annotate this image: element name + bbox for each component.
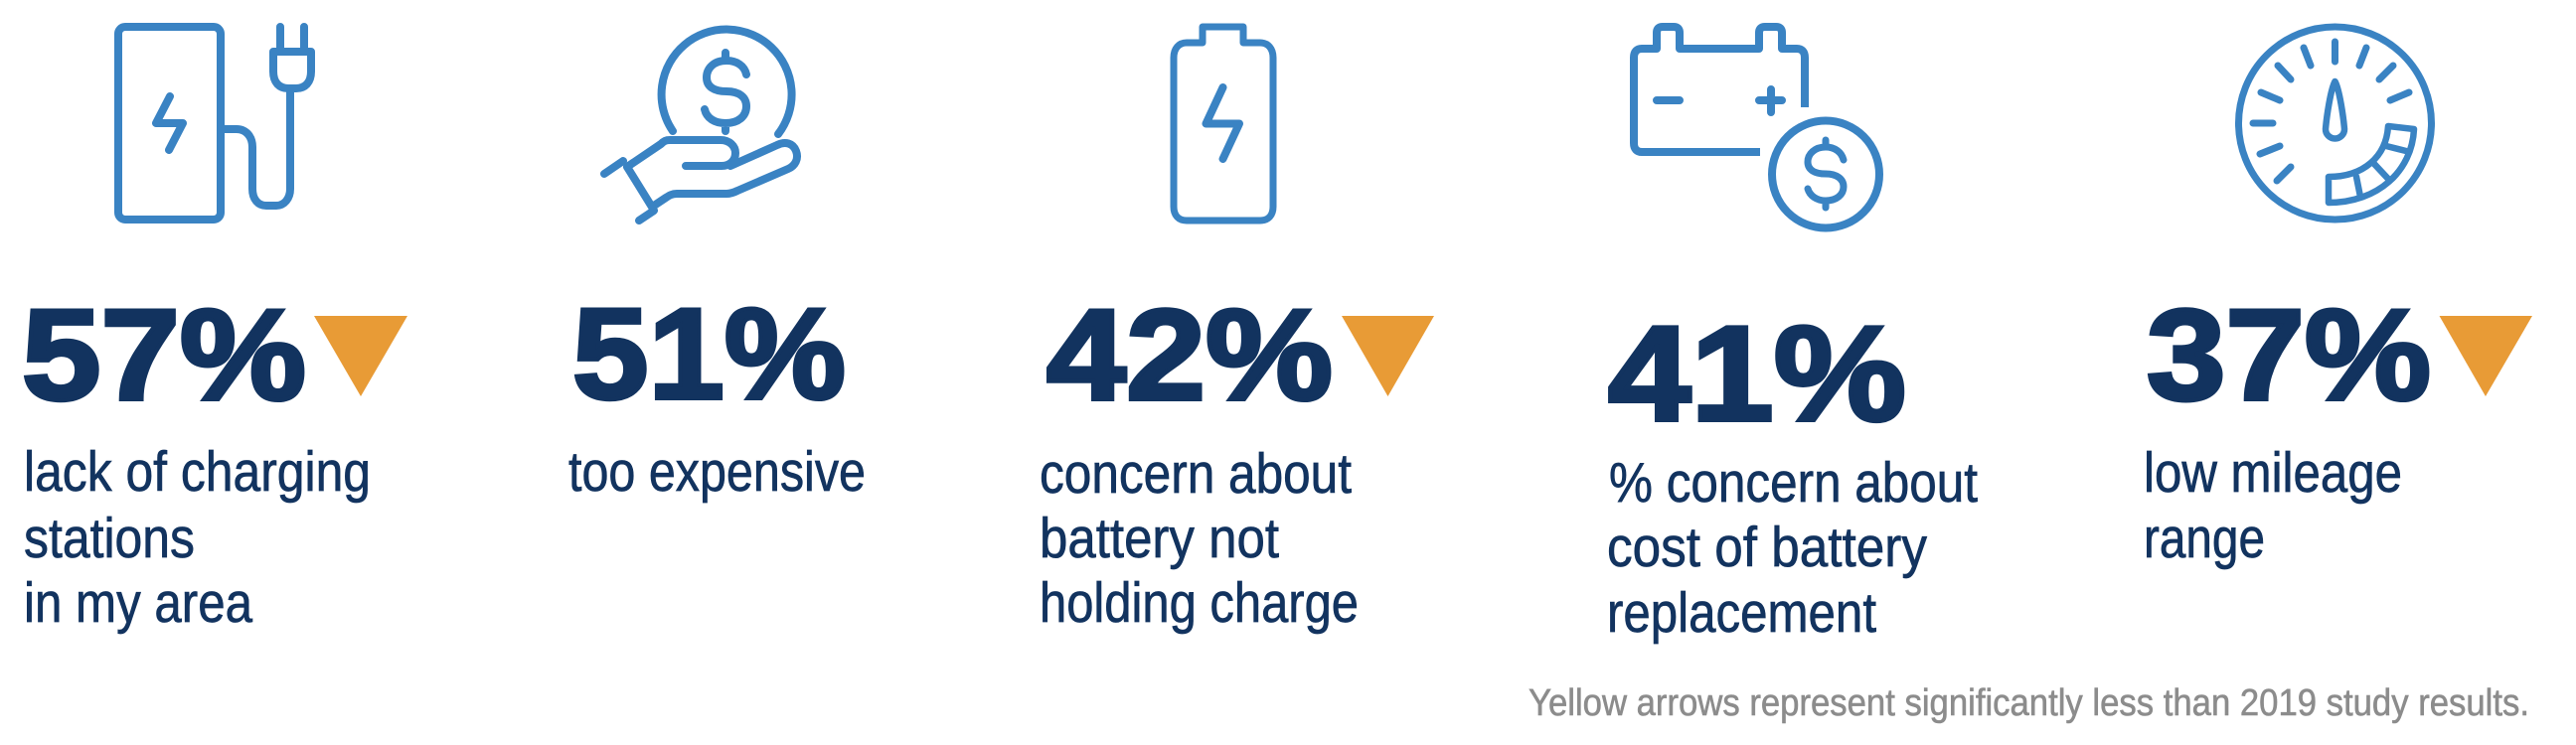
label: lack of charging stations in my area <box>24 440 371 635</box>
label: % concern about cost of battery replacement: % concern about <box>1609 451 1978 515</box>
label: low mileage range <box>2144 441 2402 570</box>
label: low mileage range: low mileage <box>2144 441 2402 505</box>
label: concern about battery not holding charge: holding charge <box>1040 571 1359 635</box>
arrow: down, lack of charging stations <box>314 316 407 396</box>
panel: cost of battery replacement <box>1607 27 1978 645</box>
icon: hand holding dollar coin <box>604 30 797 221</box>
statistic: 51%: 51% <box>572 281 846 426</box>
label: low mileage range: range <box>2144 507 2265 570</box>
label: concern about battery not holding charge: battery not <box>1040 507 1279 570</box>
icon: car battery with dollar coin <box>1634 27 1879 228</box>
arrow: down, battery not holding charge <box>1342 316 1434 396</box>
label: lack of charging stations in my area: stations <box>24 507 195 570</box>
panel: too expensive <box>568 30 866 504</box>
icon: battery with lightning bolt <box>1174 27 1273 221</box>
label: too expensive: too expensive <box>568 440 866 504</box>
statistic: 41%: 41% <box>1608 298 1906 449</box>
label: concern about battery not holding charge <box>1040 442 1359 635</box>
label: concern about battery not holding charge: concern about <box>1040 442 1352 506</box>
label: lack of charging stations in my area: lack of charging <box>24 440 371 504</box>
panel: battery not holding charge <box>1040 27 1434 635</box>
statistic: 57%: 57% <box>22 282 306 427</box>
statistic: 37%: 37% <box>2147 282 2431 427</box>
arrow: down, low mileage range <box>2439 316 2532 396</box>
label: lack of charging stations in my area: in my area <box>24 571 252 635</box>
icon: charging station with plug <box>118 27 311 220</box>
statistic: 42%: 42% <box>1046 282 1333 427</box>
label: % concern about cost of battery replacement: replacement <box>1607 581 1876 645</box>
label: % concern about cost of battery replacement: cost of battery <box>1607 516 1927 579</box>
label: % concern about cost of battery replacement <box>1607 451 1978 645</box>
icon: speedometer gauge <box>2238 27 2431 220</box>
panel: lack of charging stations <box>22 27 407 635</box>
panel: low mileage range <box>2144 27 2532 570</box>
